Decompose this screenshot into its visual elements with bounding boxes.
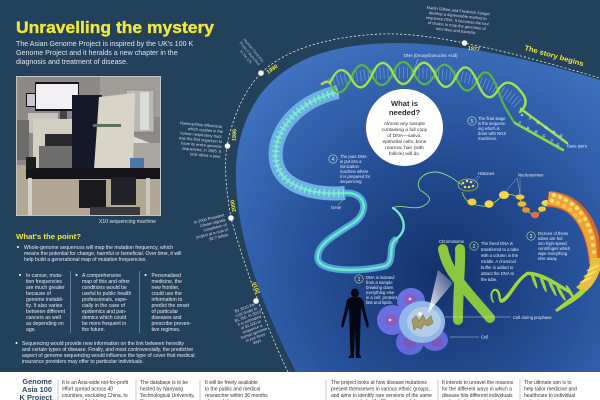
fact three: It will be freely available [205,380,258,386]
green DNA helix [322,62,567,150]
nucleosomes chain [462,172,552,218]
step 4: is put into a [340,159,362,164]
column: personalised medicine: predict the onset [152,303,190,309]
nucleosomes chain: Nucleosomes [518,172,543,178]
column: public health: map of this and other [82,279,130,285]
timeline: 1990: Project launched [238,40,261,66]
callout: what is needed: marrow, hair (with [385,145,424,151]
base pairs ladder: A [521,112,524,117]
panel title: Asia 100 [22,385,52,394]
step 3: Dozens of these [538,231,569,236]
timeline: 2010: By 2010 the [234,301,256,314]
timeline arc [226,34,600,372]
fact three: researcher within 36 months [205,393,268,399]
column: cancer: In cancer, muta- [26,273,63,279]
bottom white panel [0,372,600,400]
callout: what is needed: containing a full copy [382,127,428,133]
bullet two: Sequencing would provide new information on the link between heredity [22,341,184,347]
column: personalised medicine: Personalised [152,273,181,279]
step 2: The freed DNA is [481,241,513,246]
timeline: 2010: $1,700. In 2013 [234,309,262,323]
timeline: 2010: sequence a [242,323,264,335]
timeline: 1995: human respiratory tract, [180,130,223,139]
timeline: 1977: of choice to map the genomes of [428,20,487,31]
timeline: 1995: which resides in the [188,126,224,134]
fact three: to the public and medical [205,386,260,392]
column: public health: cially in the case of [82,303,126,309]
fact five: disease hits different individuals [442,393,513,399]
bullet one [17,245,181,263]
fact two: Technological University, [140,393,195,399]
callout: what is needed: epithelial cells, bone [382,139,427,145]
green coil [490,271,586,312]
timeline: 1977: sequence DNA. It becomes the tool [426,15,489,26]
callout: what is needed: needed? [389,108,420,117]
step 2: transferred to a tube [481,247,519,252]
fact three [200,380,268,400]
fact five: It intends to unravel the reasons [442,380,514,386]
column: personalised medicine: prescribe preven- [152,321,191,327]
fact two: hosted by Nanyang [140,386,183,392]
step 5: is the sequenc- [478,121,507,126]
fact four: present themselves in various ethnic groups, [331,386,430,392]
timeline: 1995: was the first organism to [179,135,223,144]
step 5: done with NGS [478,131,506,136]
step 5: 5 [470,119,474,125]
timeline: 2000: Clinton signals [200,217,226,228]
label: DNA: DNA (Deoxyribonucleic Acid) [404,53,458,58]
timeline: 2000: completion of [203,222,228,233]
fact one: effort spread across 40 [62,386,113,392]
fact six: help tailor medicine and [524,386,577,392]
column: personalised medicine: of particular [152,309,178,315]
timeline: 1977: develop a dependable method to [429,10,488,21]
step 1: from a sample [366,280,393,285]
step 2: the tube. [481,277,497,282]
intro text: The Asian Genome Project is inspired by the UK's 100 K [16,40,193,48]
column: cancer: genome instabil- [26,297,64,303]
timeline: 2000: $2.7 billion. [209,232,230,241]
fact six [520,380,577,400]
base pairs ladder: C [543,133,546,138]
column: public health: A comprehensive [82,273,121,279]
label: DNA [404,53,458,72]
bullet one: means the potential for change, harmful or beneficial. Over time, it will [24,251,181,257]
column: personalised medicine: new frontier, [152,285,179,291]
label: chromosome: Chromosome [439,239,465,244]
timeline: 2000: 2000 [230,199,238,212]
base pairs ladder: G [544,125,548,130]
column: public health: be more frequent in [82,321,126,327]
base pairs ladder: C [537,120,540,125]
bullet two [16,341,194,365]
fact four [326,380,432,400]
timeline: 2010: cost drops to [235,305,259,318]
label: cell during prophase: Cell during prophase [513,315,552,320]
step 2: attract the DNA to [481,271,515,276]
prophase light beam [428,270,453,313]
chromatin coil [547,191,600,293]
label: cell: Cell [481,334,488,340]
fact five: for the different ways in which a [442,386,512,392]
step 4: The pure DNA [340,154,367,159]
timeline: 2000: project at a cost of [195,227,229,240]
step 2: middle. A chemical [481,259,516,264]
base pairs ladder: C [557,142,560,147]
label: gene [331,200,343,210]
bullet two: and certain types of disease. Finally, and most controversially, the predictive [22,347,193,353]
timeline: 2010: it is estimated [237,314,262,327]
column: cancer: because of [26,291,52,297]
fact four: The project looks at how disease mutations [331,380,427,386]
step 4: sequencing. [340,179,363,184]
column: public health: professionals, espe- [82,297,128,303]
timeline: 2010: at $1,000 to [240,318,262,330]
column: cancer: age. [26,327,36,333]
heading: the story begins: The story begins [524,45,584,68]
step 4: machine where [340,169,369,174]
label: cell during prophase [445,315,552,320]
callout: what is needed: What is [391,99,418,108]
step 3: wipe everything [538,251,568,256]
callout: what is needed: follicle) will do. [389,151,420,157]
timeline: 2010: human genome [240,326,269,340]
chromosome [443,249,490,320]
timeline: 1995: took about a year [190,151,222,159]
base pairs ladder: G [559,133,563,138]
step 4 [329,154,371,184]
column: public health: demics which could [82,315,126,321]
step 5: ing which is [478,126,500,131]
timeline: 1977: Martin Gilbert and Frederick Sanger [426,5,491,16]
timeline: 1995: sequenced, in 1995. It [182,146,222,154]
timeline: 2000 [192,199,238,244]
histones: Histones [478,171,494,176]
base pairs ladder: A [527,125,530,130]
timeline: 1995: Haemophilus influenzae, [179,120,224,129]
base pairs ladder: T [551,138,554,143]
column: cancer: between different [26,309,66,315]
base pairs ladder: T [519,120,522,125]
column: personalised medicine: information to [152,297,183,303]
callout: what is needed [366,89,443,166]
label: gene: Gene [331,205,342,210]
label: cell [450,334,488,340]
timeline: 2010: days [252,338,262,345]
step 2: 2 [472,244,476,250]
column: cancer: as depending on [26,321,64,327]
photo caption: X10 sequencing machine [99,219,156,225]
person silhouette [341,288,369,358]
step 5 [468,116,507,141]
column: cancer: tion frequencies [26,279,62,285]
fact one: countries, excluding China, to [62,393,128,399]
step 1: fats and lipids. [366,300,393,305]
column: cancer: are much greater [26,285,65,291]
callout: what is needed: Almost any sample [384,121,425,127]
fact five [438,380,514,400]
column: cancer: ity. It also varies [26,303,63,309]
fact six: healthcare to individual [524,393,575,399]
column: public health: the future. [82,327,105,333]
base pairs ladder: G [534,129,538,134]
panel title: Genome [22,377,52,386]
base pairs ladder: T [529,116,532,121]
step 2: with a column in the [481,253,519,258]
base pairs ladder [519,112,563,147]
step 3: 3 [529,234,533,240]
timeline: 1990: Human Genome [242,37,266,64]
step 1 [355,275,399,305]
title: Unravelling the mystery [16,18,215,37]
bullet two: aspect of genome sequencing would influence the type of cover that medical [22,353,194,359]
step 2 [470,241,519,282]
step 1: 1 [357,277,361,283]
timeline: 1990 [235,37,279,76]
fact six: The ultimate aim is to [524,380,572,386]
fact one: It is an Asia-wide not-for-profit [62,380,129,386]
cell [377,288,448,355]
timeline: 1995: have its entire genome [181,140,223,149]
step 2: buffer is added to [481,265,514,270]
photo: X10 sequencing machine [16,76,161,216]
step 1: everything else [366,290,395,295]
section heading: What's the point? [16,234,81,241]
label: base pairs: Base pairs [567,144,587,148]
step 4: sonication [340,164,360,169]
step 4: 4 [331,157,335,163]
step 3: tubes are fed [538,236,563,241]
base pairs ladder: A [553,129,556,134]
step 1: DNA is isolated [366,275,395,280]
step 1: in a cell: proteins, [366,295,399,300]
column: personalised medicine: tive regimes. [152,327,180,333]
step 1: breaking down [366,285,394,290]
thin DNA strand [393,172,462,208]
what's the point section [16,234,194,365]
column: personalised medicine: medicine, the [152,279,182,285]
bullet two: insurance providers may offer to particular individuals. [22,359,144,365]
step 4: it is prepared for [340,174,371,179]
timeline: 1990: in the US [239,49,254,65]
step 3 [527,231,571,261]
step 3: else away. [538,256,558,261]
intro text: Genome Project and it heralds a new chapter in the [16,49,178,57]
fact four: and aims to identify rare versions of the same [331,393,432,399]
column: personalised medicine: diseases and [152,315,182,321]
bullet one: Whole-genome sequences will map the mutation frequency, which [24,245,173,251]
callout: what is needed: of DNA—saliva, [387,133,422,139]
heading block [16,18,215,66]
step 3: centrifuges which [538,246,571,251]
column: cancer: cancers as well [26,315,61,321]
blue genome field [236,43,600,372]
fact two: The database is to be [140,380,188,386]
timeline: 2010: in just three [245,331,267,343]
histones [458,171,494,191]
timeline: 2010 [231,281,272,349]
timeline: 1990: 1990 [266,64,279,76]
column: cancer [19,273,66,333]
column: personalised medicine [144,273,191,333]
teal DNA band [276,92,404,270]
timeline: 1995 [177,120,239,159]
fact two [136,380,195,400]
timeline: 2010: 2010 [252,281,262,294]
intro text: diagnosis and treatment of disease. [16,58,128,66]
timeline: 2000: In 2000 President [193,212,226,225]
column: public health [76,273,131,333]
timeline: 1977 [424,5,491,53]
column: public health: conditions would be [82,285,127,291]
column: public health: epidemics and pan- [82,309,127,315]
timeline: 1977: microbes and bacteria. [436,26,477,35]
timeline: 1977: 1977 [467,46,480,53]
step 3: into high-speed [538,241,567,246]
step 5: The final stage [478,116,506,121]
timeline: 1995: 1995 [231,129,239,141]
fact one [58,380,129,400]
column: public health: useful to public health [82,291,131,297]
column: personalised medicine: could use the [152,291,182,297]
bullet one: help build a generational map of mutation frequencies. [24,257,147,263]
step 5: machines. [478,136,497,141]
